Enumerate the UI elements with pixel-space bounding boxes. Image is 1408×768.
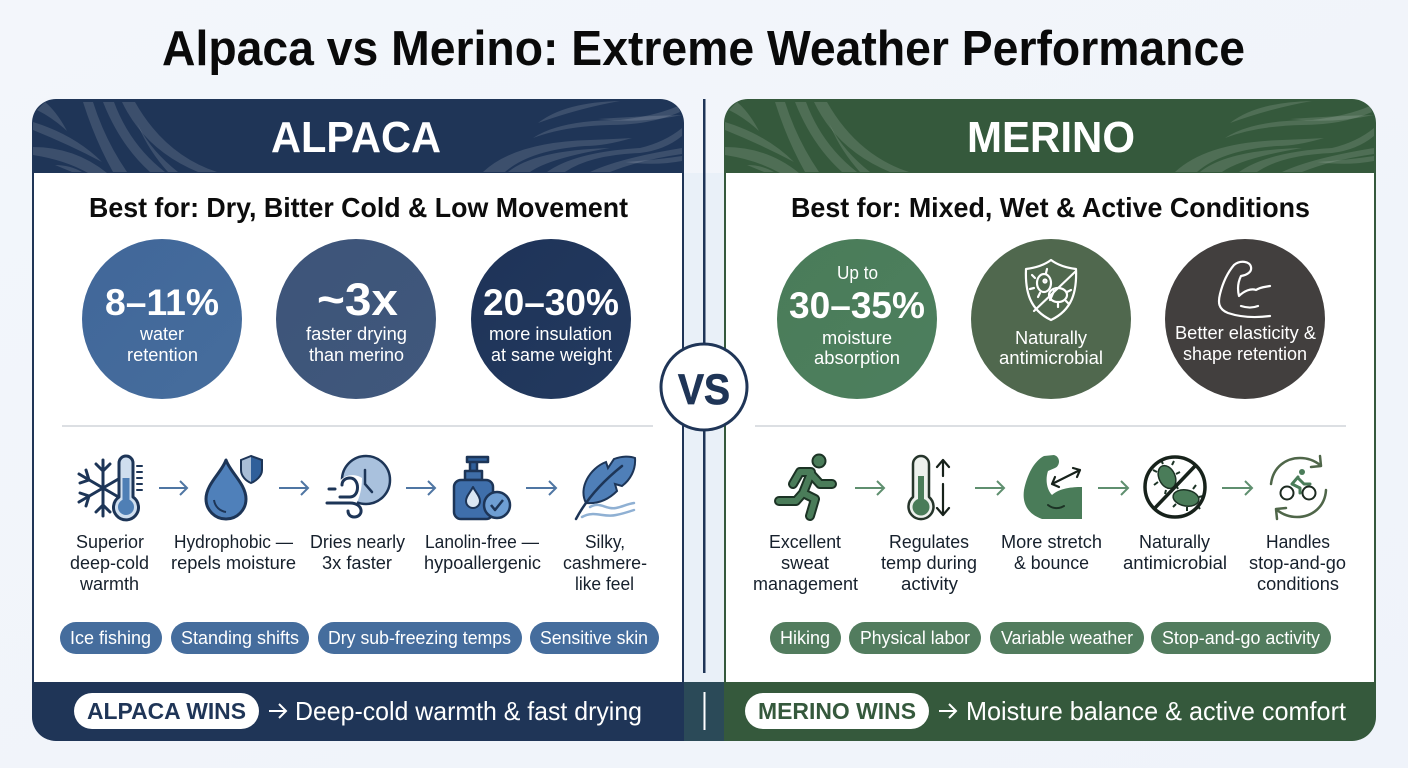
benefit labels: deep-cold [70,552,149,573]
stat: moisture absorption [777,239,937,399]
vs badge [661,344,747,430]
benefit labels: Superior [76,531,144,552]
stat: faster drying [276,239,436,399]
benefit labels: Dries nearly [310,531,406,552]
icon: no bacteria [1145,457,1205,517]
arrow [1098,481,1128,495]
alpaca header pattern [33,101,682,173]
stat: water retention [82,239,242,399]
arrow [159,481,187,495]
use-case tags: Dry sub-freezing temps [328,627,511,648]
stat: more insulation [471,239,631,399]
use-case tags: Sensitive skin [540,627,648,648]
icon: thermometer with arrows [908,456,949,519]
benefit labels: & bounce [1014,552,1089,573]
stat: water retention: water [139,323,184,344]
stat: moisture absorption: moisture [822,327,892,348]
icon: wind and clock [327,456,390,517]
benefit labels: cashmere- [563,552,647,573]
panel: merino [724,99,1376,741]
stat: naturally antimicrobial: Naturally [1015,327,1088,348]
benefit labels: Hydrophobic — [174,531,293,552]
icon: runner [779,454,832,516]
benefit labels: sweat [781,552,829,573]
stat: moisture absorption: absorption [814,347,900,368]
merino panel frame [724,99,1376,741]
icon: snowflake and thermometer [79,456,142,520]
alpaca panel frame [32,99,684,741]
benefit labels [70,531,647,594]
alpaca square bottom-right corner [650,690,684,741]
alpaca verdict [74,693,642,729]
alpaca verdict: Deep-cold warmth & fast drying [295,696,642,726]
panel: alpaca [32,99,684,741]
benefit labels: warmth [79,573,139,594]
benefit labels: Silky, [585,531,625,552]
benefit labels: activity [901,573,959,594]
merino verdict: Moisture balance & active comfort [966,696,1347,726]
icon: flexed arm with stretch arrow [1024,455,1082,519]
stat: faster drying: faster drying [306,323,407,344]
benefit labels: Regulates [889,531,969,552]
arrow [279,481,308,495]
benefit labels: 3x faster [322,552,392,573]
icon: lanolin-free bottle [454,457,510,519]
merino best for: Best for: Mixed, Wet & Active Conditions [791,192,1310,223]
merino verdict: MERINO WINS [758,698,916,724]
benefit labels: like feel [575,573,634,594]
stat: faster drying: ~3x [317,274,398,325]
merino content background [726,173,1374,682]
benefit labels: management [753,573,858,594]
merino heading: MERINO [967,113,1135,162]
icon: water drop with shield [206,456,262,519]
icon: cycling with loop arrows [1271,456,1326,519]
use-case tags [60,622,659,654]
use-case tags [770,622,1331,654]
arrow [526,481,556,495]
merino verdict [745,693,1347,729]
benefit labels: Naturally [1139,531,1211,552]
vs badge: VS [678,366,730,414]
arrow [406,481,435,495]
stat: faster drying: than merino [309,344,404,365]
stat: better elasticity: Better elasticity & [1175,322,1317,343]
stat: moisture absorption: 30–35% [789,285,925,326]
centre strip behind the divider [684,173,724,682]
stat: water retention: 8–11% [105,282,219,323]
benefit labels: temp during [881,552,977,573]
merino header pattern [725,101,1374,173]
stat: better elasticity: shape retention [1183,343,1307,364]
title: Alpaca vs Merino: Extreme Weather Performance [162,22,1245,76]
use-case tags: Standing shifts [181,627,299,648]
stat: more insulation: at same weight [491,344,612,365]
stat: more insulation: more insulation [489,323,612,344]
centre divider line [703,99,706,673]
use-case tags: Physical labor [860,627,970,648]
arrow [975,481,1004,495]
stat: better elasticity [1165,239,1325,399]
benefit labels: Handles [1266,531,1330,552]
benefit labels [753,531,1346,594]
use-case tags: Ice fishing [70,627,151,648]
stat: naturally antimicrobial [971,239,1131,399]
benefit labels: conditions [1257,573,1339,594]
icon: shield with bacteria [1026,260,1076,320]
use-case tags: Stop-and-go activity [1162,627,1321,648]
arrow [855,481,884,495]
benefit labels: stop-and-go [1249,552,1346,573]
benefit labels: Lanolin-free — [425,531,539,552]
benefit labels: repels moisture [171,552,296,573]
alpaca best for: Best for: Dry, Bitter Cold & Low Movement [89,192,628,223]
alpaca verdict: ALPACA WINS [87,698,246,724]
stat: more insulation: 20–30% [483,282,619,323]
benefit labels: More stretch [1001,531,1102,552]
centre divider in the verdict bar [704,692,706,730]
alpaca content background [34,173,682,682]
use-case tags: Hiking [780,627,830,648]
benefit labels: Excellent [769,531,841,552]
stat: moisture absorption: Up to [837,262,878,283]
merino square bottom-left corner [724,690,758,741]
arrow [1222,481,1252,495]
benefit labels: hypoallergenic [424,552,541,573]
stat: water retention: retention [127,344,198,365]
stat: naturally antimicrobial: antimicrobial [999,347,1103,368]
use-case tags: Variable weather [1001,627,1133,648]
icon: flexed arm outline [1219,262,1270,317]
centre strip at the bottom [684,682,724,741]
alpaca heading: ALPACA [271,113,441,162]
benefit labels: antimicrobial [1123,552,1227,573]
icon: feather [576,457,635,519]
